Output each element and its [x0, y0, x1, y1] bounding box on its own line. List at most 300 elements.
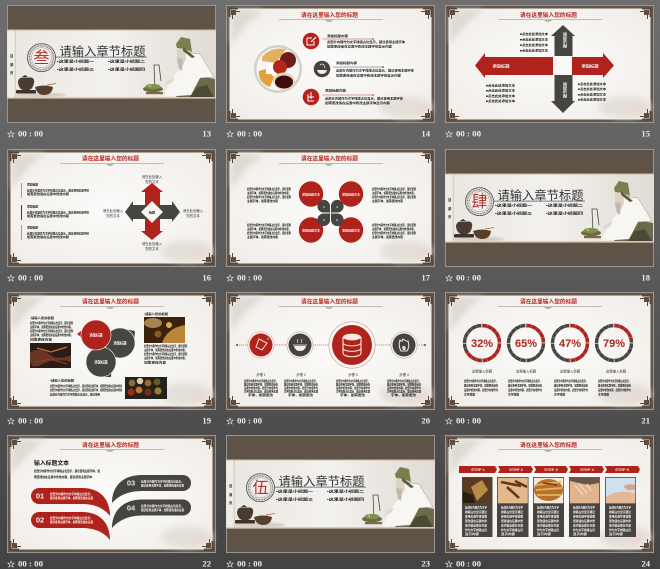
caption row 4: 00 : 00: [456, 558, 481, 568]
text list top: [520, 31, 548, 52]
image: honey food right: [144, 317, 185, 343]
column 2 text: 文字排版: [508, 392, 519, 396]
arrow labels: [492, 32, 598, 98]
callout 01: 此部分内容作为文字排版占位显示，: [50, 491, 93, 496]
text top left: 此部分内容作为文字排版占位显示，建议使用: [247, 186, 291, 191]
callout 01: [31, 488, 110, 516]
step 4 text: 字体，如需更改: [391, 392, 416, 397]
list item 2: 此部分内容作为文字排版占位显示，建议使用主题字体: [336, 68, 414, 72]
card 4: 作为文字排版占位: [573, 527, 595, 532]
step 3 text: 此部分内容作为文字排版占位显示，: [336, 378, 370, 383]
callout 01: 01: [36, 492, 44, 500]
card 2: 改内容此部分内容: [501, 522, 523, 528]
card 5: [605, 477, 636, 537]
text bottom right: 主题字体，如需更改请在设置中修改内容，: [372, 226, 416, 231]
text list left: ■点击此处添加文本: [486, 88, 515, 92]
card 2: [497, 477, 528, 537]
caption row 2: 16: [202, 272, 212, 282]
section title: 请输入章节标题: [278, 474, 364, 488]
text block left: [30, 315, 73, 342]
text bottom left: 此部分内容作为文字排版占位显示，建议使用: [247, 230, 291, 235]
step 4 text: 建议使用主题字体，如需更改请在: [387, 382, 421, 386]
card 1: [462, 477, 492, 537]
arrow labels: 您的文本: [145, 179, 159, 184]
text top left: 主题字体，如需更改内容: [247, 198, 278, 203]
text block bottom: [50, 378, 122, 396]
column 1 text: 此部分内容作为文字排版占位显示，: [464, 378, 498, 383]
text bottom left: [247, 222, 291, 239]
sidebar label: 录: [229, 492, 233, 497]
text list right: ■点击此处添加文本: [578, 81, 606, 86]
sidebar label: 页: [448, 215, 452, 219]
frame: [445, 435, 654, 553]
callout 04: 建议使用主题字体，如需更改请在设置: [141, 507, 184, 512]
caption row 3: 21: [641, 416, 650, 426]
column 4 text: 此部分内容作为文字排版占位显示，: [598, 378, 631, 383]
step 2 text: 设置中修改内容，此部分内容作为: [284, 385, 318, 390]
card 5: 显示内容: [609, 531, 623, 536]
panel: slide 20 process timeline: [226, 292, 435, 410]
step banners: STEP 4: [580, 467, 595, 472]
callout 03: 建议使用主题字体，如需更改请在设置: [141, 482, 184, 488]
callout 04: 04: [127, 504, 136, 512]
list item 1: 此部分内容作为文字排版占位显示，建议使用主题字体: [27, 188, 89, 192]
column 3 text: [554, 368, 588, 396]
sidebar label: 录: [448, 206, 452, 211]
arrow labels: 您的文本: [106, 213, 120, 218]
bullet list: [495, 202, 584, 216]
card 2: 显示内容: [501, 531, 515, 536]
ring 65%: [508, 326, 544, 360]
card 1: 作为文字排版占位: [465, 527, 487, 532]
caption row 1: 00 : 00: [456, 128, 481, 138]
column 1 text: 设置中修改内容，此部分内容作为: [464, 387, 498, 392]
step 2 text: 此部分内容作为文字排版占位显示，: [284, 378, 318, 383]
sidebar label: [448, 197, 452, 219]
text block bottom: 此部分内容作为文字排版占位显示，建议使用主题字体，如需更改请在设置中修改: [50, 383, 122, 388]
step 3 text: 设置中修改内容，此部分内容作为: [336, 385, 370, 390]
arrow labels: 您的文本: [145, 246, 159, 251]
bullet list: •这里是小标题三: [57, 66, 95, 72]
text bottom right: 此部分内容作为文字排版占位显示，建议使用: [372, 230, 416, 235]
list item 2: 此部分内容作为文字排版占位显示，建议使用主题字体: [27, 210, 89, 214]
card 1: 改内容此部分内容: [465, 522, 487, 528]
cross arrows: [125, 183, 180, 240]
panel: slide 18 section cover: [445, 149, 654, 267]
arrow labels: 请在此处输入: [183, 208, 204, 213]
list item 3: 添加标题内容: [325, 88, 346, 92]
card 3: 排版占位显示建议: [537, 509, 559, 514]
bullet list: •这里是小标题四: [546, 210, 584, 216]
frame: [445, 5, 654, 123]
text block left: 主题字体，如需更改请在设置中修改内容，: [30, 332, 73, 337]
sidebar label: [229, 483, 233, 505]
list item 1: 如需更改请在设置中修改内容: [27, 191, 69, 196]
panel: slide 16 arrows and list: [7, 149, 216, 267]
text bottom right: 主题字体，如需更改内容: [372, 234, 403, 239]
card 3: 改内容此部分内容: [537, 522, 559, 528]
text top right: 此部分内容作为文字排版占位显示，建议使用: [372, 186, 416, 191]
column 3 text: 建议使用主题字体，如需更改请在: [554, 382, 588, 388]
text block left: 此部分内容作为文字排版占位显示，建议使用: [30, 320, 73, 325]
bullet list: •这里是小标题一: [57, 58, 95, 64]
intro text: [34, 468, 100, 479]
section title: 请输入章节标题: [498, 188, 584, 202]
bullet list: •这里是小标题四: [108, 66, 146, 72]
list item 2: 添加标题内容: [336, 60, 357, 65]
ring 79%: [596, 326, 632, 360]
circle labels: 4: [336, 205, 338, 209]
image: spices: [125, 377, 167, 399]
column 3 text: 这里输入标题: [560, 368, 581, 374]
text block right: [144, 311, 187, 364]
list item 3: 此部分内容作为文字排版占位显示，建议使用主题字体: [325, 96, 403, 100]
bullet list: •这里是小标题三: [495, 210, 533, 216]
frame: [7, 435, 216, 553]
arrow right: [572, 53, 614, 78]
step 2 text: 步骤 2: [296, 372, 306, 377]
panel: slide 15 cross arrows: [445, 5, 654, 123]
card 3: 使用主题字体如需: [537, 514, 559, 518]
list item 2: 添加标题: [27, 204, 38, 208]
step 2 text: 文字排版占位显示，建议使用主题: [284, 388, 318, 394]
circle labels: 添加标题文本: [302, 228, 320, 232]
text list right: ■点击此处添加文本: [578, 96, 606, 102]
arrow labels: [103, 174, 204, 251]
caption row 4: 00 : 00: [237, 558, 262, 568]
list item 3: [21, 224, 89, 240]
panel: slide 23 section cover: [226, 435, 435, 553]
text list right: ■点击此处添加文本: [578, 86, 606, 91]
icon: bowl step 2: [287, 332, 313, 358]
circle labels: 2: [323, 218, 325, 222]
card 2: 作为文字排版占位: [501, 527, 523, 532]
caption row 2: 00 : 00: [237, 272, 262, 282]
frame: [226, 149, 435, 267]
card 5: 改内容此部分内容: [609, 522, 631, 528]
card 4: 改内容此部分内容: [573, 522, 595, 528]
bubble dark bottom: [86, 347, 116, 377]
step 4 text: 此部分内容作为文字排版占位显示，: [387, 378, 421, 383]
text block right: •请输入您的标题: [144, 311, 168, 316]
callout 04: [112, 500, 191, 528]
text list right: ■点击此处添加文本: [578, 92, 606, 96]
step 1 text: [244, 372, 278, 397]
text bottom left: 此部分内容作为文字排版占位显示，建议使用: [247, 222, 291, 227]
step banners: STEP 2: [509, 467, 524, 472]
column 3 text: 此部分内容作为文字排版占位显示，: [554, 378, 588, 383]
section layout: [226, 435, 435, 553]
list item 1: 添加标题: [27, 182, 38, 186]
step 3 text: 文字排版占位显示，建议使用主题: [336, 388, 370, 394]
column 2 text: 此部分内容作为文字排版占位显示，: [508, 378, 542, 383]
panel: slide 17 four circles: [226, 149, 435, 267]
list item 3: 添加标题: [27, 224, 38, 230]
frame: [445, 292, 654, 410]
sidebar label: 页: [10, 71, 14, 75]
text block right: 主题字体，如需更改请在设置中修改内容，: [144, 347, 187, 352]
column 2 text: 这里输入标题: [516, 368, 537, 374]
callout 03: 03: [127, 478, 135, 488]
step 1 text: 建议使用主题字体，如需更改请在: [244, 382, 278, 386]
caption row 3: 00 : 00: [456, 416, 481, 426]
card 3: 作为文字排版占位: [537, 527, 559, 532]
text list left: [486, 82, 515, 103]
panel: slide 13 section cover: [7, 5, 216, 123]
column 4 text: [598, 368, 631, 396]
callout 02: 02: [36, 516, 44, 524]
text block right: 主题字体，如需更改请在设置中修改内容，: [144, 355, 187, 360]
ring 47%: [552, 326, 588, 360]
step 3 text: 步骤 3: [348, 372, 358, 377]
callout 01: 建议使用主题字体，如需更改请在设置: [50, 495, 93, 500]
intro text: 需更改请在设置中修改内容，建议使用主题字体: [34, 474, 92, 479]
arrow up: [551, 25, 575, 56]
callout 03: [112, 475, 191, 503]
arrow labels: 请在此处输入: [142, 241, 163, 246]
text bottom left: 主题字体，如需更改请在设置中修改内容，: [247, 226, 291, 231]
caption row 3: 20: [421, 416, 430, 426]
column 1 text: 文字排版: [464, 392, 475, 396]
text block left: •请输入您的标题: [30, 315, 54, 320]
caption row 4: 24: [641, 558, 651, 568]
icon: database step 3: [329, 322, 375, 368]
step 3 text: 字体，如需更改: [340, 392, 365, 397]
text bottom right: 此部分内容作为文字排版占位显示，建议使用: [372, 222, 416, 227]
list item 3: [303, 88, 403, 105]
step 4 text: [387, 372, 421, 397]
arrow labels: 请在此处输入: [103, 208, 124, 213]
list item 2: 如需更改请在设置中修改主题字体显示内容: [336, 72, 401, 78]
list item 1: 此部分内容作为文字排版占位显示，建议使用主题字体: [327, 39, 405, 44]
panel: slide 19 speech bubbles: [7, 292, 216, 410]
text list right: [578, 81, 606, 102]
panel: slide 14 herbs list: [226, 5, 435, 123]
caption row 1: [8, 128, 650, 138]
card 5: 使用主题字体如需: [609, 514, 631, 518]
text block left: 主题字体，如需更改请在设置中修改内容，: [30, 324, 73, 329]
circle labels: 1: [323, 205, 325, 209]
step 1 text: 此部分内容作为文字排版占位显示，: [244, 378, 278, 383]
text top right: 此部分内容作为文字排版占位显示，建议使用: [372, 194, 416, 199]
arrow labels: 请在此处输入: [142, 174, 163, 179]
column 1 text: 建议使用主题字体，如需更改请在: [464, 382, 498, 388]
title: 请在这里输入您的标题: [301, 154, 358, 162]
caption row 3: [8, 416, 650, 426]
caption row 2: 17: [421, 272, 431, 282]
bullet list: •这里是小标题一: [495, 202, 533, 208]
card 4: 显示内容: [573, 531, 587, 536]
text block left: 如需更改内容: [30, 336, 52, 342]
sidebar label: 目: [10, 53, 13, 58]
sidebar label: [10, 53, 14, 75]
section layout: [445, 149, 654, 267]
arrow labels: 您的文本: [186, 213, 200, 218]
step banners: [459, 466, 640, 473]
caption row 1: 14: [421, 128, 431, 138]
caption row 1: 00 : 00: [237, 128, 262, 138]
bullet list: •这里是小标题三: [276, 496, 314, 502]
bullet list: [57, 58, 146, 72]
column 4 text: 这里输入标题: [606, 368, 627, 374]
step 1 text: 设置中修改内容，此部分内容作为: [244, 385, 278, 390]
image: dark food left: [30, 343, 71, 368]
section title: 请输入章节标题: [60, 44, 146, 58]
arrow down: [551, 75, 575, 113]
caption row 2: 00 : 00: [18, 272, 43, 282]
bubble red: [77, 320, 111, 350]
title: 请在这里输入您的标题: [301, 11, 358, 19]
column 3 text: 文字排版: [554, 392, 565, 396]
ring 65%: 65%: [515, 338, 537, 350]
bullet list: •这里是小标题二: [108, 58, 146, 64]
text block bottom: •请输入您的标题: [50, 378, 74, 382]
step banners: STEP 1: [471, 467, 486, 472]
text list left: ■点击此处添加文本: [486, 82, 515, 88]
step 1 text: 字体，如需更改: [248, 392, 273, 397]
sidebar label: 录: [10, 62, 14, 67]
arrow labels: 添加标题: [562, 82, 568, 98]
circle labels: 添加标题文本: [342, 192, 360, 196]
column 3 text: 设置中修改内容，此部分内容作为: [554, 387, 588, 392]
card 4: 更改请在设置中修: [573, 518, 595, 523]
text list top: ■点击此处添加文本: [520, 36, 548, 42]
callout 04: 此部分内容作为文字排版占位显示，: [141, 503, 184, 508]
card 5: 排版占位显示建议: [609, 509, 631, 514]
circle labels: 添加标题文本: [302, 192, 320, 196]
title: 请在这里输入您的标题: [520, 441, 577, 449]
card 4: 排版占位显示建议: [573, 509, 595, 514]
column 2 text: 设置中修改内容，此部分内容作为: [508, 387, 542, 392]
text top left: 主题字体，如需更改请在设置中修改内容，: [247, 190, 291, 195]
section layout: [7, 5, 216, 123]
callout 02: 建议使用主题字体，如需更改请在设置: [50, 519, 93, 524]
seal character: 叁: [33, 49, 50, 67]
text block bottom: 此部分内容作为文字排版占位显示，建议使用: [50, 392, 100, 396]
card 5: 作为文字排版占位: [609, 527, 631, 532]
step 2 text: 建议使用主题字体，如需更改请在: [284, 382, 318, 386]
card 5: 此部分内容作为文字: [609, 504, 631, 510]
text top right: 主题字体，如需更改内容: [372, 198, 403, 203]
card 3: 更改请在设置中修: [537, 518, 559, 523]
sidebar label: 目: [229, 483, 232, 488]
bubble red: 添加标题: [90, 332, 102, 338]
list item 3: 如需更改请在设置中修改主题字体显示内容: [325, 100, 390, 105]
step 2 text: 字体，如需更改: [288, 392, 313, 397]
step 4 text: 文字排版占位显示，建议使用主题: [387, 388, 421, 394]
bubble dark bottom: 添加标题: [94, 358, 108, 364]
caption row 3: 00 : 00: [237, 416, 262, 426]
arrow left: [475, 53, 553, 78]
bullet list: •这里是小标题四: [327, 496, 365, 502]
column 4 text: 文字排版: [598, 392, 609, 396]
bubble dark right: [105, 328, 135, 358]
cross arrows: 标题: [149, 210, 155, 214]
image: herb plate: [254, 45, 302, 93]
sidebar label: 目: [448, 197, 451, 202]
list item 2: 如需更改请在设置中修改内容: [27, 213, 69, 218]
card 1: 此部分内容作为文字: [465, 504, 487, 510]
text block right: 此部分内容作为文字排版占位显示，建议使用: [144, 351, 187, 356]
text block right: 如需更改内容: [144, 360, 166, 364]
step banners: STEP 3: [544, 467, 559, 472]
bubble dark right: 添加标题: [114, 340, 126, 346]
dark petals: [317, 200, 344, 226]
red circles: [299, 181, 363, 243]
caption row 3: 19: [202, 416, 211, 426]
callout 03: 此部分内容作为文字排版占位显示，: [141, 478, 184, 484]
ring 32%: 32%: [471, 338, 493, 350]
frame: [226, 292, 435, 410]
ring 32%: [464, 326, 500, 360]
frame: [7, 292, 216, 410]
column 2 text: 建议使用主题字体，如需更改请在: [508, 382, 542, 388]
list item 2: [21, 204, 89, 220]
step banners: STEP 5: [615, 467, 630, 472]
card 3: 此部分内容作为文字: [537, 504, 559, 510]
seal character: 伍: [252, 479, 269, 497]
text block right: 此部分内容作为文字排版占位显示，建议使用: [144, 343, 187, 348]
card 1: 使用主题字体如需: [465, 514, 487, 518]
list item 3: 如需更改请在设置中修改内容: [27, 234, 69, 239]
callout 02: 此部分内容作为文字排版占位显示，: [50, 515, 93, 520]
step 1 text: 步骤 1: [256, 372, 266, 377]
text top right: 主题字体，如需更改请在设置中修改内容，: [372, 190, 416, 195]
step 3 text: 建议使用主题字体，如需更改请在: [336, 382, 370, 386]
text list top: ■点击此处添加文本: [520, 42, 548, 47]
card 4: [569, 477, 600, 537]
card 4: 使用主题字体如需: [573, 514, 595, 518]
caption row 2: [8, 272, 651, 282]
intro text: 此部分内容作为文字排版占位显示，建议使用主题字体，如: [34, 468, 100, 473]
card 2: 排版占位显示建议: [501, 509, 523, 514]
ring 79%: 79%: [603, 338, 625, 350]
card 1: 排版占位显示建议: [465, 509, 487, 514]
text list left: ■点击此处添加文本: [486, 93, 515, 98]
bullet list: •这里是小标题一: [276, 488, 314, 494]
text top left: [247, 186, 291, 203]
bullet list: [276, 488, 365, 502]
timeline: [236, 344, 426, 346]
caption row 3: 00 : 00: [18, 416, 43, 426]
card 5: 更改请在设置中修: [609, 518, 631, 523]
card 3: [533, 477, 564, 537]
text block bottom: 此部分内容作为文字排版占位显示，建议使用主题字体，如需更改请在设置中修改: [50, 387, 122, 392]
text list top: ■点击此处添加文本: [520, 31, 548, 36]
step 4 text: 设置中修改内容，此部分内容作为: [387, 385, 421, 390]
column 2 text: [508, 368, 542, 396]
list item 1: [303, 33, 405, 49]
title: 请在这里输入您的标题: [301, 298, 358, 306]
step 3 text: [336, 372, 370, 397]
card 1: 显示内容: [465, 531, 479, 536]
panel: slide 24 five steps: [445, 435, 654, 553]
icon: fire step 4: [391, 332, 417, 358]
caption row 1: 15: [641, 128, 650, 138]
card 2: 更改请在设置中修: [501, 518, 523, 523]
step 4 text: 步骤 4: [399, 372, 409, 377]
card 4: 此部分内容作为文字: [573, 504, 595, 510]
frame: [7, 149, 216, 267]
step 1 text: 文字排版占位显示，建议使用主题: [244, 388, 278, 394]
step 2 text: [284, 372, 318, 397]
caption row 1: 13: [202, 128, 211, 138]
list item 1: [21, 182, 89, 198]
ring 47%: 47%: [559, 338, 581, 350]
arrow labels: 添加标题: [582, 62, 598, 68]
frame: [226, 5, 435, 123]
seal character: 肆: [471, 193, 488, 211]
